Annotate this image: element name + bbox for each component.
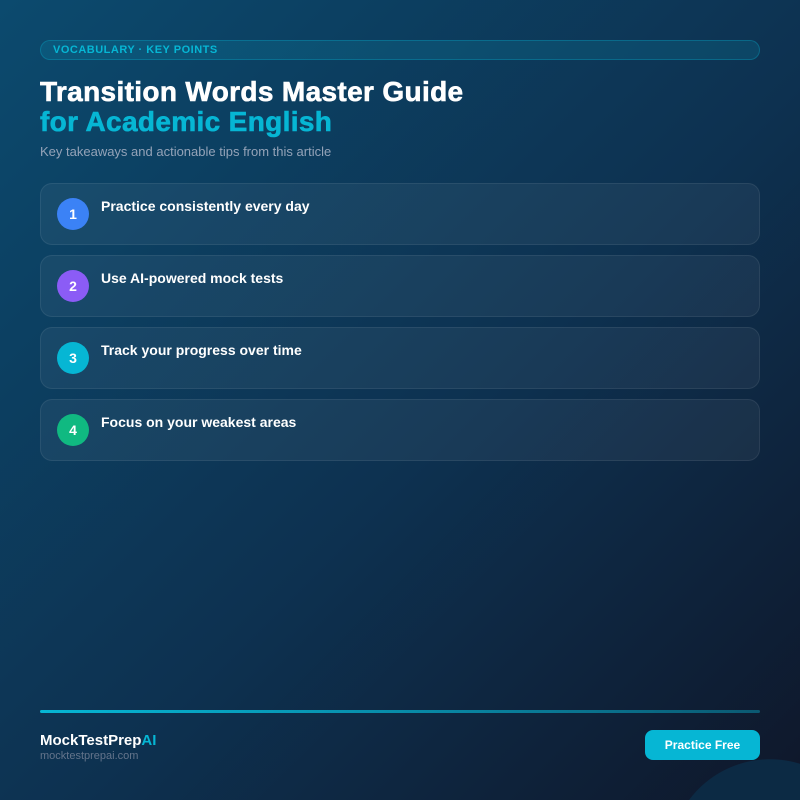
call to action button: Practice Free bbox=[665, 738, 740, 752]
number badge 4: 4 bbox=[69, 422, 77, 438]
number badge 3: 3 bbox=[69, 350, 77, 366]
number badge 4 bbox=[57, 414, 89, 446]
title: Transition Words Master Guide bbox=[40, 76, 463, 107]
number badge 2: 2 bbox=[69, 278, 77, 294]
tip text 2: Use AI-powered mock tests bbox=[101, 270, 283, 286]
number badge 1: 1 bbox=[69, 206, 77, 222]
panel: tip 2 bbox=[40, 255, 760, 317]
footer divider bar bbox=[40, 710, 760, 713]
panel: tip 4 bbox=[40, 399, 760, 461]
badge: category bbox=[40, 40, 760, 60]
title bbox=[40, 76, 463, 138]
brand block bbox=[40, 732, 156, 762]
number badge 1 bbox=[57, 198, 89, 230]
panel: tip 1 bbox=[40, 183, 760, 245]
panel: tip 3 bbox=[40, 327, 760, 389]
subtitle: Key takeaways and actionable tips from this article bbox=[40, 144, 331, 159]
tip text 4: Focus on your weakest areas bbox=[101, 414, 296, 430]
badge label: VOCABULARY · KEY POINTS bbox=[53, 44, 218, 56]
decorative circle: bottom right bbox=[680, 755, 800, 800]
brand url: mocktestprepai.com bbox=[40, 750, 138, 762]
call to action button bbox=[645, 730, 760, 760]
brand name: MockTestPrepAI bbox=[40, 732, 156, 749]
title: for Academic English bbox=[40, 106, 332, 137]
number badge 3 bbox=[57, 342, 89, 374]
number badge 2 bbox=[57, 270, 89, 302]
tip text 3: Track your progress over time bbox=[101, 342, 302, 358]
tip text 1: Practice consistently every day bbox=[101, 198, 310, 214]
